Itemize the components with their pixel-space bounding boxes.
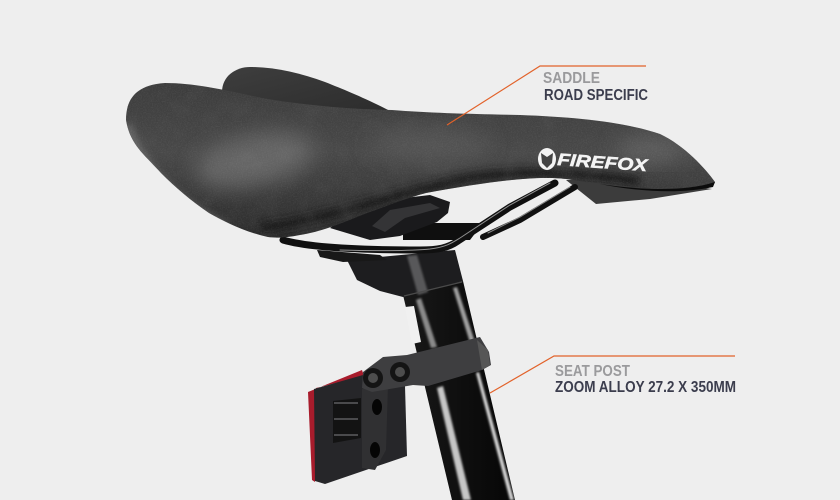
red reflector	[308, 370, 364, 482]
saddle rails	[283, 183, 575, 251]
seat clamp head	[347, 250, 463, 297]
mounting holes	[372, 399, 382, 415]
callout: seat post	[490, 356, 736, 396]
seat post value: ZOOM ALLOY 27.2 X 350MM	[555, 379, 736, 396]
reflector back plate	[314, 375, 407, 484]
seat post leader line	[490, 356, 735, 393]
callout: saddle	[447, 66, 648, 125]
saddle	[120, 67, 720, 245]
seat post sticker	[405, 306, 421, 344]
logo wordmark: FIREFOX	[557, 150, 650, 175]
saddle shading	[120, 80, 720, 245]
saddle clamp	[317, 195, 483, 262]
saddle label: SADDLE	[543, 70, 600, 87]
seat post highlights	[416, 287, 514, 500]
saddle value: ROAD SPECIFIC	[544, 87, 648, 104]
seat post label: SEAT POST	[555, 363, 630, 380]
clamp band	[362, 337, 491, 392]
saddle body	[126, 83, 715, 238]
reflector bracket	[308, 337, 491, 484]
saddle underside	[566, 178, 712, 204]
firefox logo	[538, 148, 650, 175]
bolts	[363, 368, 383, 388]
seat post	[403, 281, 515, 500]
saddle rear ridge	[222, 67, 392, 112]
logo badge	[538, 148, 556, 170]
saddle leader line	[447, 66, 646, 125]
